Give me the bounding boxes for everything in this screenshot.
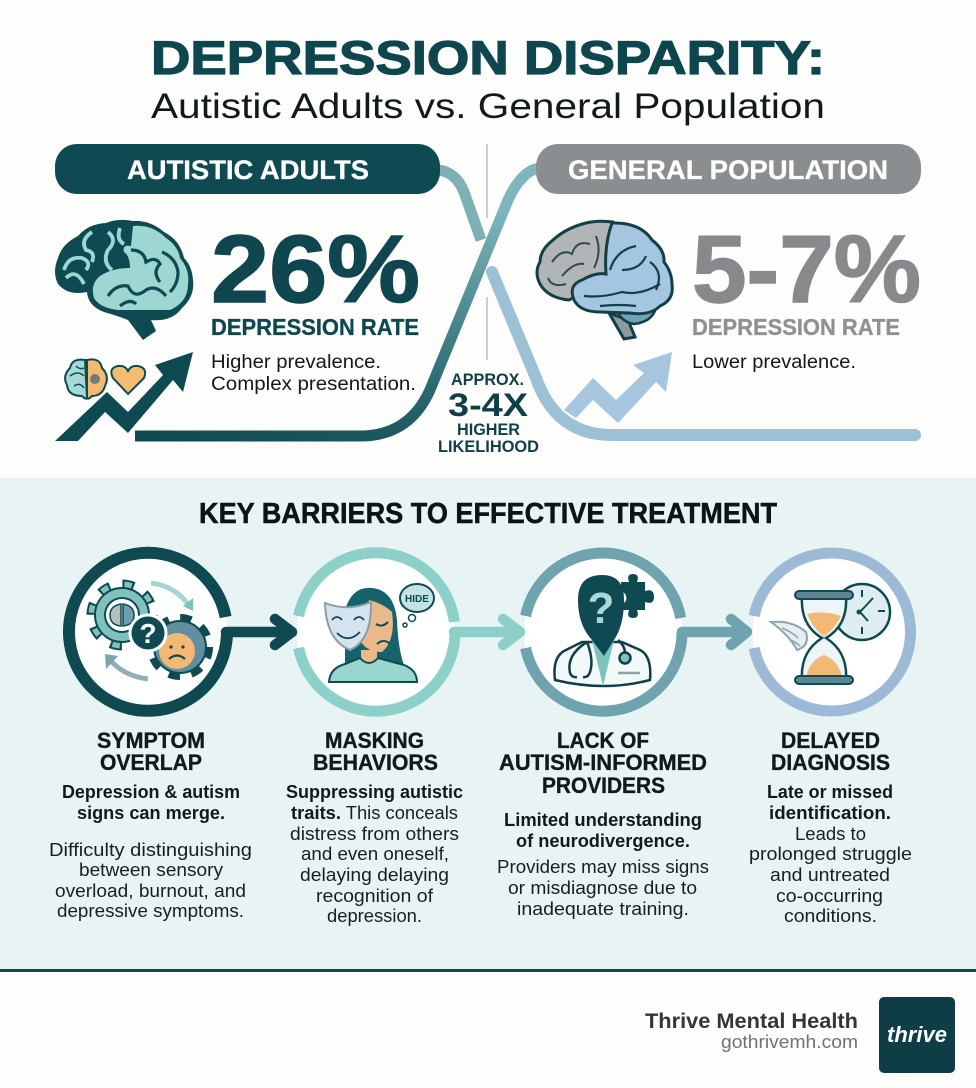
website: gothrivemh.com bbox=[721, 1032, 858, 1052]
text: symptom overlap description bbox=[49, 782, 252, 921]
panel: treatment barriers background bbox=[0, 478, 976, 970]
label: depression rate: DEPRESSION RATE bbox=[211, 314, 419, 340]
logo: thrive bbox=[887, 1022, 947, 1047]
icon: doctor with puzzle piece bbox=[554, 574, 654, 686]
text: symptom overlap description: signs can merge. bbox=[77, 803, 225, 823]
label: symptom overlap: SYMPTOM bbox=[97, 728, 205, 753]
label: lack of providers: PROVIDERS bbox=[542, 773, 665, 798]
text: lower prevalence: Lower prevalence. bbox=[692, 352, 856, 373]
crossing curve: general population trend bbox=[492, 272, 915, 435]
text: symptom overlap description: overload, burnout, and bbox=[55, 881, 246, 901]
crossing curve: upper left connector bbox=[438, 170, 481, 240]
text: masking description: delaying delaying bbox=[300, 865, 449, 885]
footer background bbox=[0, 971, 976, 1088]
pill: general population bbox=[536, 144, 921, 194]
text: masking description: recognition of bbox=[316, 886, 434, 906]
text: masking description: and even oneself, bbox=[301, 844, 449, 864]
label: symptom overlap: OVERLAP bbox=[100, 750, 202, 775]
arrow: overlap to masking bbox=[226, 619, 292, 645]
text: masking description: traits. This conceals bbox=[291, 803, 458, 823]
label: masking behaviors: MASKING bbox=[325, 728, 424, 753]
label: masking behaviors: BEHAVIORS bbox=[313, 750, 438, 775]
label: delayed diagnosis: DIAGNOSIS bbox=[771, 750, 890, 775]
text: delayed diagnosis description: identification. bbox=[769, 803, 891, 823]
text: masking description: depression. bbox=[327, 906, 422, 926]
heading: key barriers: KEY BARRIERS TO EFFECTIVE TREATMENT bbox=[199, 498, 778, 530]
text: symptom overlap description: depressive symptoms. bbox=[57, 901, 244, 921]
label: depression rate: DEPRESSION RATE bbox=[692, 314, 900, 340]
text: higher prevalence bbox=[211, 352, 416, 395]
icon: grey and blue brain bbox=[537, 221, 672, 339]
icon: person with mask bbox=[325, 584, 434, 682]
callout: 3-4x higher likelihood: 3-4X bbox=[448, 387, 529, 423]
step 4: delayed diagnosis bbox=[749, 553, 912, 926]
text: symptom overlap description: Difficulty distinguishing bbox=[49, 840, 252, 860]
callout: 3-4x higher likelihood bbox=[438, 371, 539, 456]
text: providers description: Providers may miss signs bbox=[497, 857, 709, 877]
text: delayed diagnosis description: prolonged struggle bbox=[749, 844, 912, 864]
text: delayed diagnosis description: Late or missed bbox=[767, 782, 893, 802]
panel: autistic adults bbox=[55, 144, 440, 441]
label: masking behaviors bbox=[313, 728, 438, 775]
text: providers description: inadequate training. bbox=[517, 899, 689, 919]
pill: autistic adults bbox=[55, 144, 440, 194]
step 2: masking behaviors bbox=[286, 553, 463, 926]
text: higher prevalence: Complex presentation. bbox=[211, 374, 416, 395]
arrow: modest trend bbox=[564, 352, 672, 423]
label: delayed diagnosis: DELAYED bbox=[781, 728, 880, 753]
text: providers description bbox=[497, 810, 709, 919]
text: delayed diagnosis description: co-occurring bbox=[776, 886, 883, 906]
text: providers description: Limited understanding bbox=[504, 810, 702, 830]
brand name: Thrive Mental Health bbox=[645, 1010, 858, 1033]
title: DEPRESSION DISPARITY: bbox=[151, 31, 825, 84]
arrow: masking to providers bbox=[454, 619, 520, 645]
ring: delayed diagnosis bbox=[752, 553, 910, 711]
text: masking description: Suppressing autistic bbox=[286, 782, 463, 802]
label: delayed diagnosis bbox=[771, 728, 890, 775]
ring: providers bbox=[524, 553, 682, 711]
icon: hourglass with clock and wing bbox=[771, 584, 890, 684]
callout: 3-4x higher likelihood: LIKELIHOOD bbox=[438, 438, 539, 456]
text: higher prevalence: Higher prevalence. bbox=[211, 352, 381, 373]
title: Autistic Adults vs. General Population bbox=[151, 87, 825, 126]
label: symptom overlap bbox=[97, 728, 205, 775]
callout: 3-4x higher likelihood: APPROX. bbox=[451, 371, 524, 389]
icon: heart bbox=[111, 366, 145, 394]
text: delayed diagnosis description: and untreated bbox=[770, 865, 890, 885]
text: symptom overlap description: between sensory bbox=[79, 860, 223, 880]
crossing curve: autistic adults trend bbox=[135, 168, 540, 436]
icon: doctor with puzzle piece: ? bbox=[588, 584, 614, 633]
text: delayed diagnosis description: conditions. bbox=[784, 906, 877, 926]
callout: 3-4x higher likelihood: HIGHER bbox=[457, 421, 520, 439]
title bbox=[151, 31, 825, 126]
pill: general population: GENERAL POPULATION bbox=[568, 155, 888, 185]
stat: 26%: 26% bbox=[211, 216, 420, 323]
text: providers description: or misdiagnose due to bbox=[508, 878, 697, 898]
step 3: lack of autism-informed providers bbox=[497, 553, 709, 919]
logo bbox=[879, 997, 955, 1073]
ring: symptom overlap bbox=[69, 553, 227, 711]
text: masking description bbox=[286, 782, 463, 926]
text: delayed diagnosis description bbox=[749, 782, 912, 926]
pill: autistic adults: AUTISTIC ADULTS bbox=[127, 155, 369, 185]
panel: general population bbox=[536, 144, 921, 423]
label: lack of providers bbox=[499, 728, 707, 798]
divider bbox=[486, 144, 488, 360]
icon: puzzle brain bbox=[55, 220, 193, 340]
text: symptom overlap description: Depression & autism bbox=[62, 782, 240, 802]
arrow: providers to delayed diagnosis bbox=[682, 619, 747, 645]
step 1: symptom overlap bbox=[49, 553, 252, 921]
text: delayed diagnosis description: Leads to bbox=[795, 824, 866, 844]
icon: gears with question mark bbox=[93, 583, 207, 679]
text: providers description: of neurodivergence. bbox=[516, 831, 690, 851]
stat: 5-7%: 5-7% bbox=[692, 216, 921, 323]
label: lack of providers: LACK OF bbox=[557, 728, 649, 753]
icon: person with mask: HIDE bbox=[405, 594, 429, 605]
icon: small brain bbox=[65, 359, 107, 399]
footer brand bbox=[645, 997, 955, 1073]
arrow: rising trend bbox=[55, 352, 193, 441]
text: masking description: distress from others bbox=[290, 824, 459, 844]
ring: masking behaviors bbox=[297, 553, 455, 711]
label: lack of providers: AUTISM-INFORMED bbox=[499, 750, 707, 775]
icon: gears with question mark: ? bbox=[139, 618, 157, 649]
